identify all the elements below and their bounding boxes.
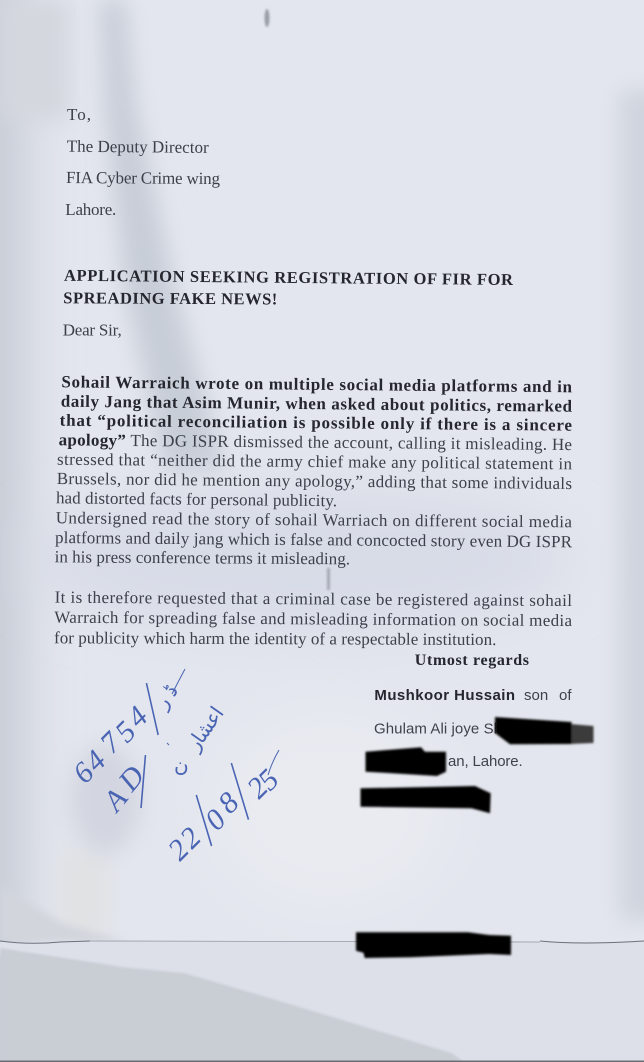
paragraph: account of the statement [56, 372, 573, 510]
paragraph: undersigned: in his press conference terms it misleading. [55, 547, 350, 568]
signature block: son [524, 687, 548, 704]
paragraph: account of the statement: Sohail Warraich wrote on multiple social media platforms and in [61, 372, 573, 396]
salutation: Dear Sir, [63, 321, 122, 340]
signature block [374, 687, 572, 770]
handwritten diary note: / [178, 778, 229, 861]
addressee block [65, 105, 221, 219]
signature block: Ghulam Ali joye Sh [374, 720, 502, 737]
addressee block: To, [67, 105, 91, 124]
paragraph: undersigned: platforms and daily jang which is false and concocted story even DG ISPR [55, 528, 573, 551]
paragraph: undersigned: Undersigned read the story of sohail Warriach on different social media [56, 508, 573, 531]
handwritten diary note: اعشار [181, 702, 229, 756]
signature block: Mushkoor Hussain [374, 687, 515, 704]
handwritten diary note: 08 [199, 786, 246, 837]
heading [63, 266, 514, 308]
paragraph: request: Warraich for spreading false and misleading information on social media [54, 608, 573, 630]
handwritten diary note: ن [174, 753, 189, 777]
paragraph: undersigned [55, 508, 573, 568]
paragraph: request [54, 588, 573, 649]
handwritten diary note: / [213, 746, 268, 837]
paragraph: request: for publicity which harm the identity of a respectable institution. [54, 628, 496, 649]
redaction: address [366, 747, 446, 776]
redaction: phone [360, 786, 491, 813]
redaction: name [495, 717, 594, 744]
handwritten diary note: / [129, 666, 175, 750]
redaction: footer [356, 932, 511, 958]
paragraph: account of the statement: daily Jang that Asim Munir, when asked about politics, remarked [61, 392, 573, 416]
handwritten diary note: / [132, 737, 154, 825]
handwritten diary note: 22 [162, 821, 208, 867]
heading: SPREADING FAKE NEWS! [63, 288, 277, 308]
addressee block: FIA Cyber Crime wing [66, 168, 221, 188]
signature block: an, Lahore. [448, 753, 523, 770]
paragraph: request: It is therefore requested that a criminal case be registered against sohail [55, 588, 572, 610]
addressee block: The Deputy Director [67, 137, 209, 157]
paragraph: account of the statement: that “political reconciliation is possible only if there is a sincere [60, 411, 573, 435]
handwritten diary note: 64754 [67, 700, 155, 790]
handwritten diary note: ڈر [149, 679, 183, 714]
signature block: of [559, 687, 572, 704]
paragraph: account of the statement: stressed that “neither did the army chief make any political statement in [57, 450, 573, 473]
heading: APPLICATION SEEKING REGISTRATION OF FIR FOR [64, 266, 514, 289]
paragraph: account of the statement: Brussels, nor did he mention any apology,” adding that some individuals [57, 469, 572, 493]
handwritten diary note: 25 [241, 763, 286, 805]
paragraph: account of the statement: apology” The DG ISPR dismissed the account, calling it misleading. He [59, 430, 572, 454]
paragraph: account of the statement: had distorted facts for personal publicity. [56, 488, 337, 510]
closing: Utmost regards [415, 652, 529, 669]
addressee block: Lahore. [65, 200, 116, 219]
handwritten diary note: AD [96, 759, 152, 819]
handwritten diary note [67, 666, 286, 867]
